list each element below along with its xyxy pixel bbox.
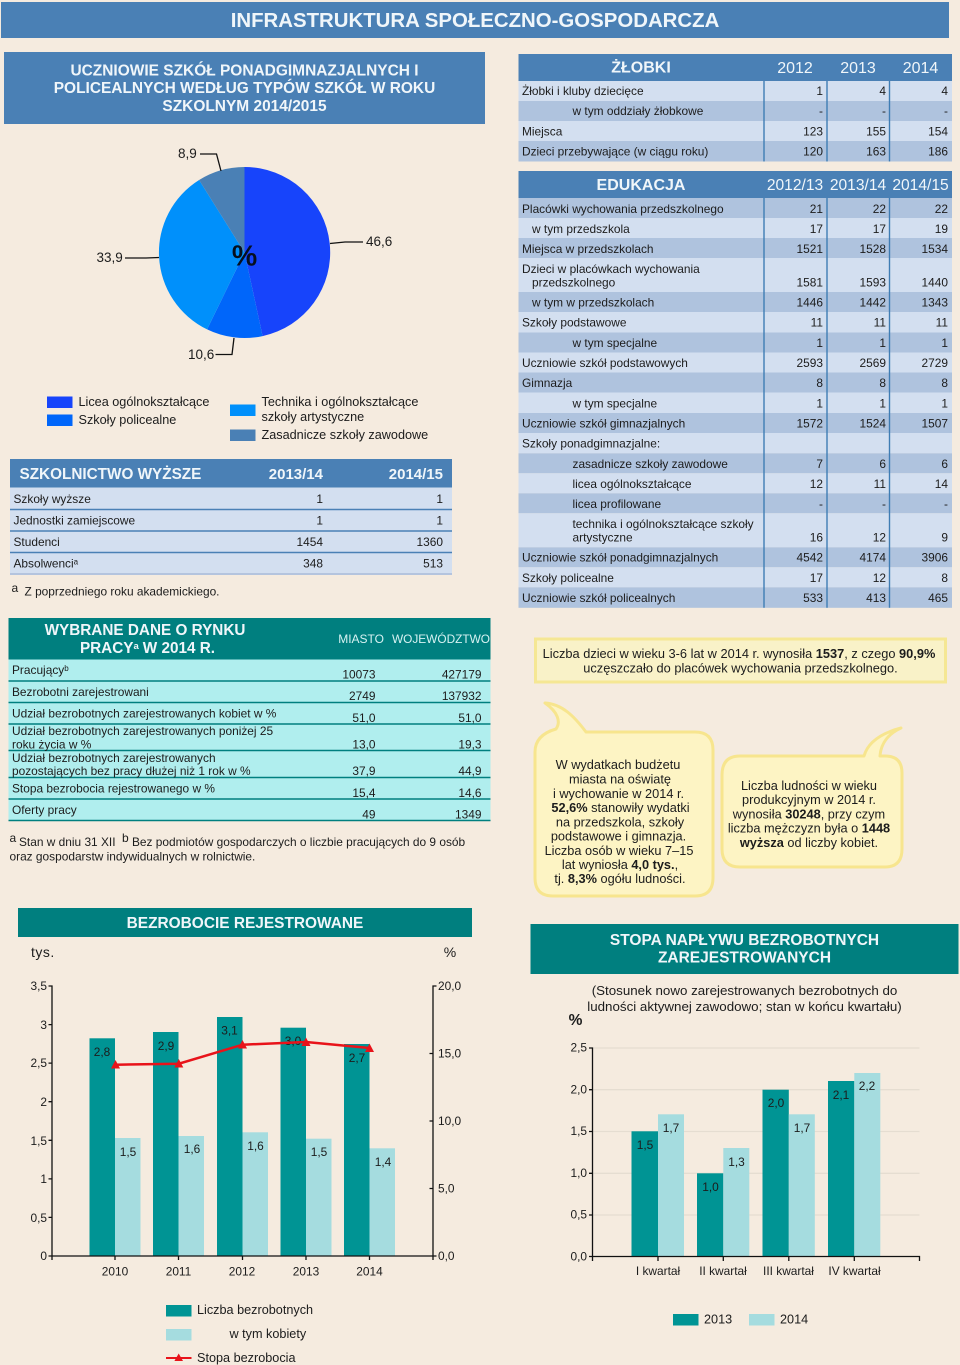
panel: registered unemployment chart (18, 908, 472, 1365)
table: education: 1446 (797, 296, 823, 310)
chart legend: Stopa bezrobocia (197, 1351, 296, 1365)
callout: children aged 3-6: uczęszczało do placówek wychowania przedszkolnego. (583, 660, 898, 676)
callout bubble: education spending: 52,6% stanowiły wydatki (551, 800, 690, 815)
table: nurseries: Miejsca (522, 124, 563, 138)
table: higher education: SZKOLNICTWO WYŻSZE (20, 466, 201, 483)
combo chart: 5,0 (438, 1182, 455, 1196)
table: education: 465 (928, 591, 948, 605)
footnotes: labour market: b (122, 831, 129, 845)
table: higher education: 1 (316, 514, 323, 528)
table: education: 533 (803, 591, 823, 605)
pie legend: Licea ogólnokształcące (78, 395, 209, 409)
table: education: 4174 (860, 550, 886, 564)
pie chart: 10,6 (188, 347, 214, 362)
table: education: 8 (816, 376, 823, 390)
table: education: licea ogólnokształcące (572, 477, 692, 491)
table: education: 1524 (860, 416, 886, 430)
bar chart: 0,5 (570, 1208, 587, 1222)
title banner: INFRASTRUKTURA SPOŁECZNO-GOSPODARCZA (231, 10, 720, 32)
table: education: Szkoły policealne (522, 571, 614, 585)
bar chart: 1,7 (794, 1121, 811, 1135)
pie legend: Technika i ogólnokształcące (262, 395, 418, 409)
footnote: higher education: a (12, 581, 18, 595)
chart subtitle (587, 983, 902, 1014)
bar chart: 2,5 (570, 1040, 587, 1054)
table: education: 2012/13 (767, 177, 823, 194)
table: labour market: WOJEWÓDZTWO (392, 631, 490, 646)
table: higher education: 348 (303, 556, 323, 570)
table: education: 2593 (797, 356, 823, 370)
chart heading: STOPA NAPŁYWU BEZROBOTNYCH (610, 932, 879, 949)
table: higher education: 2014/15 (389, 466, 443, 483)
combo chart: 1,4 (375, 1155, 392, 1169)
table: labour market: Udział bezrobotnych zarejestrowanych poniżej 25 (12, 724, 273, 738)
bar chart: 2,0 (768, 1096, 785, 1110)
combo chart: 2,5 (30, 1056, 47, 1070)
table: labour market: W 2014 R. (143, 640, 215, 657)
pie heading (4, 52, 485, 124)
table: labour market: Stopa bezrobocia rejestrowanego w % (12, 782, 215, 796)
table: labour market: 15,4 (352, 786, 376, 800)
callout bubble: education spending: tj. 8,3% ogółu ludności. (554, 871, 686, 886)
pie legend: szkoły artystyczne (262, 410, 364, 424)
pie chart: 46,6 (366, 234, 392, 249)
table: education: licea profilowane (572, 497, 661, 511)
table: education: 6 (879, 457, 886, 471)
table: education: 4542 (797, 550, 823, 564)
table: education: 1 (816, 396, 823, 410)
combo chart: 2,7 (349, 1051, 366, 1065)
callout bubble: working-age population: Liczba ludności w wieku (741, 778, 877, 793)
chart legend: 2013 (704, 1312, 732, 1326)
table: education: 9 (941, 530, 948, 544)
callout bubble: working-age population: wynosiła 30248, przy czym (732, 806, 885, 822)
title banner (1, 2, 949, 38)
table: higher education: 1 (316, 492, 323, 506)
footnotes: labour market: a (10, 831, 16, 845)
table: education: 1593 (860, 276, 886, 290)
combo chart (30, 944, 462, 1278)
table: education: Uczniowie szkół ponadgimnazjalnych (522, 550, 718, 564)
table: education: 1 (879, 336, 886, 350)
bar chart: 1,3 (728, 1155, 745, 1169)
pie chart: 33,9 (96, 250, 123, 265)
bar chart: 1,0 (702, 1180, 719, 1194)
table: labour market: roku życia w % (12, 738, 92, 752)
table: nurseries: 2014 (903, 60, 938, 77)
table: nurseries: 186 (928, 144, 948, 158)
bar chart: I kwartał (636, 1264, 680, 1278)
chart heading (18, 908, 472, 937)
table: nurseries (518, 54, 952, 162)
table: labour market: 137932 (442, 689, 482, 703)
table: education: Szkoły podstawowe (522, 316, 627, 330)
combo chart: 1 (40, 1172, 47, 1186)
pie legend: Szkoły policealne (78, 413, 176, 427)
table: education: 2729 (922, 356, 948, 370)
table: education: 1581 (797, 276, 823, 290)
table: labour market: 10073 (342, 668, 376, 682)
combo chart: 2,9 (158, 1039, 175, 1053)
table: labour market: b (64, 664, 69, 673)
table: labour market: Bezrobotni zarejestrowani (12, 685, 149, 699)
table: education: Uczniowie szkół gimnazjalnych (522, 416, 685, 430)
table: education: 1528 (860, 242, 886, 256)
callout bubble: working-age population: wyższa od liczby kobiet. (739, 835, 878, 850)
table: higher education: 513 (423, 556, 443, 570)
table: labour market: 49 (362, 808, 376, 822)
panel: inflow rate chart (530, 924, 958, 1326)
chart legend (166, 1303, 313, 1365)
footnote: higher education: Z poprzedniego roku akademickiego. (24, 584, 220, 598)
combo chart: 2011 (166, 1264, 192, 1278)
chart heading (530, 924, 958, 974)
callout bubble: working-age population (722, 728, 902, 867)
bar chart: 2,2 (859, 1079, 876, 1093)
table: education: EDUKACJA (597, 177, 686, 194)
table: education: 6 (941, 457, 948, 471)
callout bubble: education spending: Liczba osób w wieku 7–15 (545, 843, 693, 858)
bar chart: 1,5 (637, 1138, 654, 1152)
footnotes: labour market: Bez podmiotów gospodarczych o liczbie pracujących do 9 osób (132, 835, 466, 849)
table: education: 2014/15 (892, 177, 949, 194)
table: higher education: 2013/14 (269, 466, 324, 483)
table: labour market: pozostających bez pracy dłużej niż 1 rok w % (12, 764, 251, 778)
combo chart: 0,5 (30, 1211, 47, 1225)
bar chart: 0,0 (570, 1250, 587, 1264)
table: education: 11 (874, 477, 886, 491)
bar chart (569, 1012, 920, 1278)
table: labour market: Udział bezrobotnych zarejestrowanych (12, 751, 216, 765)
table: labour market: Oferty pracy (12, 803, 77, 817)
bar chart: II kwartał (699, 1264, 747, 1278)
table: nurseries: 2012 (777, 60, 813, 77)
table: labour market: WYBRANE DANE O RYNKU (45, 622, 245, 639)
bar chart: 2,1 (833, 1088, 850, 1102)
table: labour market: 44,9 (458, 764, 482, 778)
combo chart: 3,5 (30, 979, 47, 993)
combo chart: 1,5 (30, 1134, 47, 1148)
table: education: 21 (810, 202, 823, 216)
table: education: 1 (879, 396, 886, 410)
chart heading: BEZROBOCIE REJESTROWANE (127, 915, 363, 932)
table: education: w tym specjalne (572, 396, 657, 410)
bar chart: III kwartał (763, 1264, 814, 1278)
callout: children aged 3-6 (536, 639, 946, 682)
callout bubble: education spending: miasta na oświatę (569, 772, 671, 786)
table: education: 12 (873, 571, 886, 585)
table: education: 1442 (860, 296, 886, 310)
table: higher education: Jednostki zamiejscowe (14, 514, 135, 528)
bar chart: 1,5 (570, 1124, 587, 1138)
table: education: 1440 (922, 276, 948, 290)
table: education: 17 (810, 571, 823, 585)
pie heading: SZKOLNYM 2014/2015 (162, 98, 327, 115)
callout bubble: working-age population: produkcyjnym w 2014 r. (742, 792, 876, 807)
table: labour market: 2749 (349, 689, 376, 703)
table: education: zasadnicze szkoły zawodowe (572, 457, 728, 471)
table: education: 8 (941, 376, 948, 390)
table: education: 16 (810, 530, 823, 544)
table: education: 3906 (922, 550, 948, 564)
chart legend: 2014 (780, 1312, 808, 1326)
table: higher education: 1360 (417, 535, 443, 549)
combo chart: tys. (31, 944, 55, 960)
table: nurseries: 163 (866, 144, 886, 158)
table: higher education: Absolwenci (14, 556, 74, 570)
table: education: 17 (873, 222, 886, 236)
combo chart: 1,5 (120, 1145, 137, 1159)
table: nurseries: 154 (928, 124, 948, 138)
table: education: Uczniowie szkół podstawowych (522, 356, 688, 370)
table: education: 22 (873, 202, 886, 216)
table: education: 22 (935, 202, 948, 216)
callout bubble: education spending: na przedszkola, szkoły (556, 814, 685, 830)
combo chart: 2013 (293, 1264, 320, 1278)
table: higher education (10, 459, 452, 575)
table: nurseries: - (819, 104, 823, 118)
bar chart: IV kwartał (828, 1264, 881, 1278)
combo chart: 2012 (229, 1264, 256, 1278)
pie chart: % (232, 240, 257, 272)
table: education: technika i ogólnokształcące szkoły (572, 517, 754, 531)
table: labour market: 19,3 (458, 738, 482, 752)
table: education: 14 (935, 477, 948, 491)
callout bubble: working-age population: liczba mężczyzn była o 1448 (728, 820, 890, 836)
table: labour market: 37,9 (352, 764, 376, 778)
table: education (518, 171, 952, 608)
combo chart: 3,1 (221, 1024, 238, 1038)
table: education: Dzieci w placówkach wychowania (522, 262, 700, 276)
table: education: - (819, 497, 823, 511)
combo chart: 1,5 (311, 1145, 328, 1159)
table: education: 1 (941, 396, 948, 410)
table: education: 17 (810, 222, 823, 236)
table: higher education: a (74, 558, 79, 566)
table: education: 7 (816, 457, 823, 471)
callout bubble: education spending: podstawowe i gimnazja. (551, 828, 686, 844)
table: education: w tym w przedszkolach (531, 296, 654, 310)
bar chart: 2,0 (570, 1082, 587, 1096)
table: education: 413 (866, 591, 886, 605)
table: education: Uczniowie szkół policealnych (522, 591, 675, 605)
table: higher education: 1 (436, 514, 443, 528)
bar chart: % (569, 1012, 583, 1029)
footnotes: labour market: oraz gospodarstw indywidualnych w rolnictwie. (10, 850, 255, 864)
table: labour market: MIASTO (338, 632, 384, 646)
table: education: 1507 (922, 416, 948, 430)
table: labour market: 14,6 (458, 786, 482, 800)
callout bubble: education spending: i wychowanie w 2014 r. (553, 786, 684, 801)
table: education: w tym przedszkola (531, 222, 630, 236)
pie legend: Zasadnicze szkoły zawodowe (262, 428, 428, 442)
panel: students pie chart (4, 52, 485, 442)
table: education: przedszkolnego (532, 276, 616, 290)
pie chart: 8,9 (178, 146, 197, 161)
callout bubble: education spending: W wydatkach budżetu (556, 757, 680, 772)
pie chart (96, 146, 392, 362)
combo chart: 3 (40, 1018, 47, 1032)
footnotes: labour market (10, 831, 466, 864)
combo chart: 2,8 (94, 1045, 111, 1059)
table: nurseries: 120 (803, 144, 823, 158)
combo chart: 10,0 (438, 1114, 462, 1128)
combo chart: 2010 (102, 1264, 129, 1278)
table: higher education: 1 (436, 492, 443, 506)
combo chart: 20,0 (438, 979, 462, 993)
combo chart: 1,6 (184, 1142, 201, 1156)
chart subtitle: ludności aktywnej zawodowo; stan w końcu kwartału) (587, 999, 902, 1014)
table: labour market (8, 618, 490, 822)
table: higher education: Szkoły wyższe (14, 492, 91, 506)
footnotes: labour market: Stan w dniu 31 XII (19, 835, 116, 849)
table: education: 11 (936, 316, 948, 330)
chart legend: w tym kobiety (228, 1327, 307, 1341)
table: nurseries: 2013 (840, 60, 876, 77)
table: labour market: Pracujący (12, 663, 64, 677)
combo chart: 1,6 (247, 1139, 264, 1153)
table: nurseries: 155 (866, 124, 886, 138)
table: higher education: Studenci (14, 535, 60, 549)
table: nurseries: 1 (816, 84, 823, 98)
table: nurseries: - (882, 104, 886, 118)
combo chart: 2014 (356, 1264, 383, 1278)
table: education: 1343 (922, 296, 948, 310)
callout bubble: education spending (535, 703, 713, 896)
table: education: Szkoły ponadgimnazjalne: (522, 436, 660, 450)
table: education: 11 (811, 316, 823, 330)
table: labour market: 427179 (442, 668, 482, 682)
table: education: artystyczne (572, 530, 633, 544)
table: education: 8 (879, 376, 886, 390)
table: education: 1534 (922, 242, 948, 256)
table: education: - (944, 497, 948, 511)
callout bubble: education spending: lat wyniosła 4,0 tys., (562, 857, 678, 872)
table: education: 11 (874, 316, 886, 330)
table: labour market: 13,0 (352, 738, 376, 752)
table: education: 1572 (797, 416, 823, 430)
combo chart: 0,0 (438, 1249, 455, 1263)
table: nurseries: Żłobki i kluby dziecięce (522, 84, 644, 98)
chart legend: Liczba bezrobotnych (197, 1303, 313, 1317)
table: education: 1 (816, 336, 823, 350)
pie heading: POLICEALNYCH WEDŁUG TYPÓW SZKÓŁ W ROKU (54, 79, 435, 97)
table: education: 12 (810, 477, 823, 491)
table: nurseries: ŻŁOBKI (611, 58, 671, 76)
table: nurseries: 4 (941, 84, 948, 98)
line: unemployment rate (111, 1038, 374, 1068)
table: nurseries: w tym oddziały żłobkowe (572, 104, 704, 118)
bar chart: 1,0 (570, 1166, 587, 1180)
table: labour market: a (133, 641, 139, 652)
chart heading: ZAREJESTROWANYCH (658, 950, 831, 966)
table: labour market: 51,0 (458, 711, 482, 725)
bar chart: 1,7 (663, 1121, 680, 1135)
table: labour market: 51,0 (352, 711, 376, 725)
combo chart: 2 (40, 1095, 47, 1109)
table: education: 19 (935, 222, 948, 236)
table: education: 12 (873, 530, 886, 544)
pie heading: UCZNIOWIE SZKÓŁ PONADGIMNAZJALNYCH I (70, 62, 419, 80)
chart subtitle: (Stosunek nowo zarejestrowanych bezrobotnych do (592, 983, 897, 998)
table: education: - (882, 497, 886, 511)
table: education: w tym specjalne (572, 336, 657, 350)
table: education: 1 (941, 336, 948, 350)
table: labour market: 1349 (455, 808, 482, 822)
table: nurseries: Dzieci przebywające (w ciągu roku) (522, 144, 708, 158)
table: nurseries: 123 (803, 124, 823, 138)
callout: children aged 3-6: Liczba dzieci w wieku 3-6 lat w 2014 r. wynosiła 1537, z czego 90,9% (543, 646, 936, 661)
pie legend (47, 395, 428, 442)
table: education: Placówki wychowania przedszkolnego (522, 202, 724, 216)
combo chart: % (444, 944, 456, 960)
table: education: 2013/14 (830, 177, 887, 194)
table: education: 8 (941, 571, 948, 585)
table: higher education: 1454 (297, 535, 323, 549)
combo chart: 0 (40, 1249, 47, 1263)
table: education: Miejsca w przedszkolach (522, 242, 654, 256)
combo chart: 15,0 (438, 1046, 462, 1060)
chart legend (673, 1312, 808, 1326)
table: labour market: Udział bezrobotnych zarejestrowanych kobiet w % (12, 706, 277, 720)
table: nurseries: 4 (879, 84, 886, 98)
table: labour market: PRACY (80, 640, 133, 657)
table: education: Gimnazja (522, 376, 573, 390)
table: education: 2569 (860, 356, 886, 370)
combo chart: 3,0 (285, 1034, 302, 1048)
table: nurseries: - (944, 104, 948, 118)
table: education: 1521 (797, 242, 823, 256)
